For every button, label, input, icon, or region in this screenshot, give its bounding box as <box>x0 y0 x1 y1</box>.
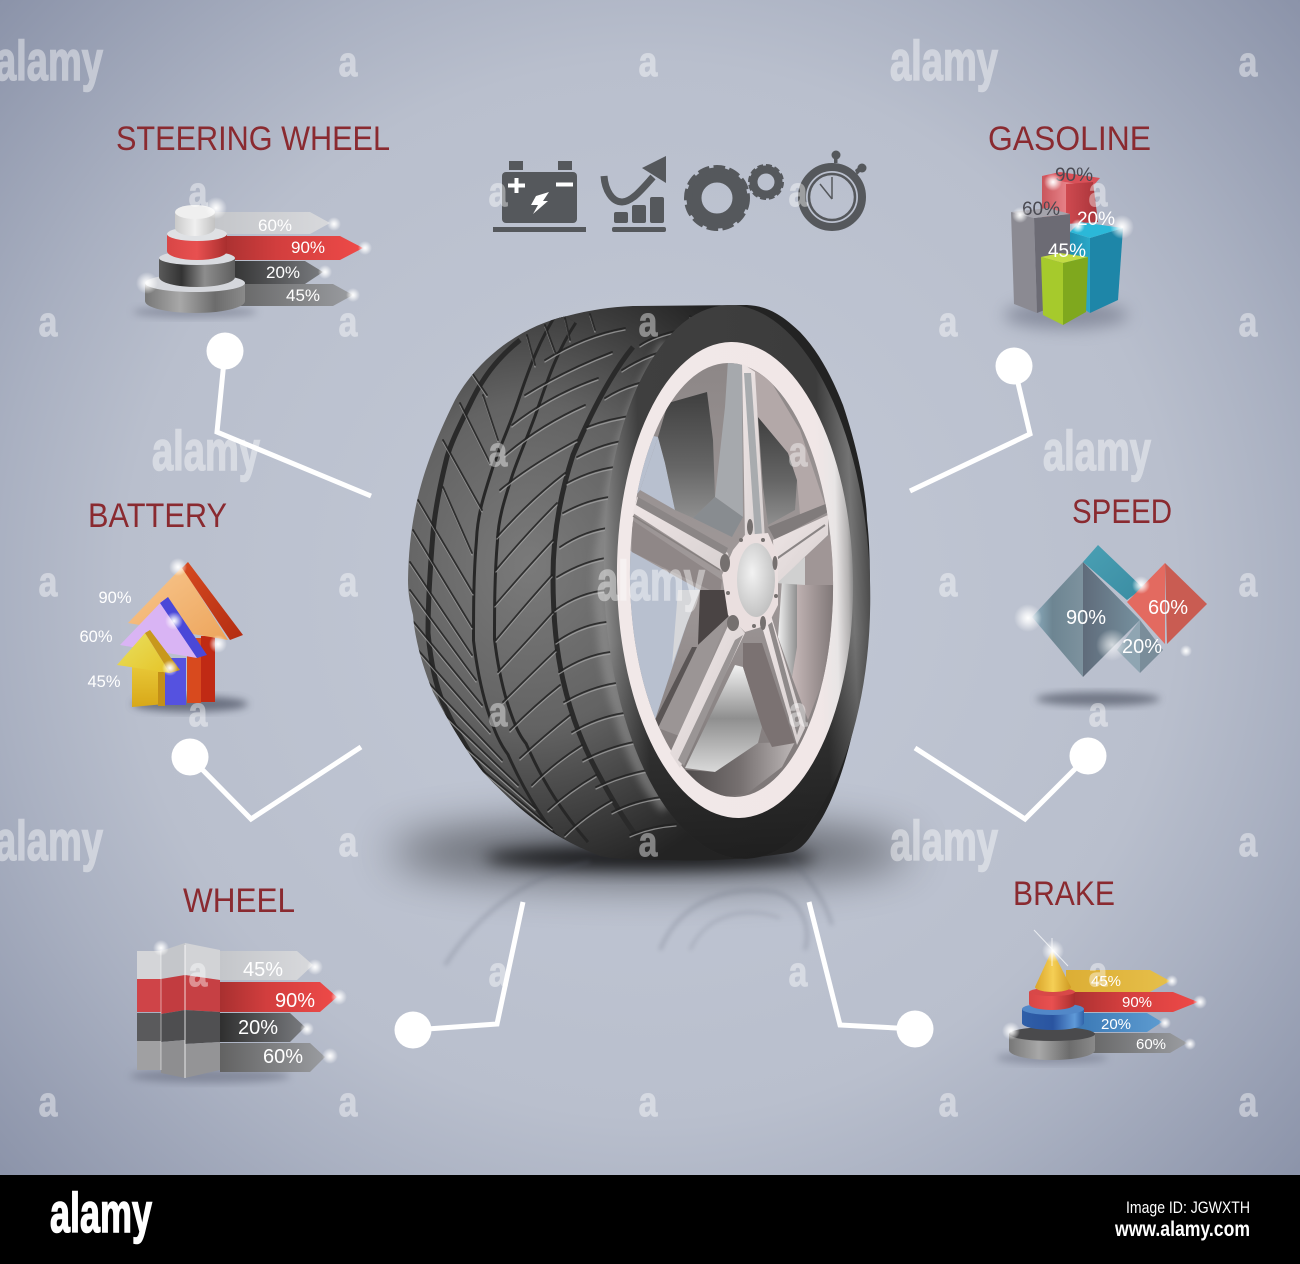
chart: wheel folded banners <box>130 940 347 1083</box>
labels: 20% <box>1077 209 1115 230</box>
stock watermarks: a <box>1239 300 1258 346</box>
stock watermarks: a <box>789 950 808 996</box>
chart: speed diamonds <box>1014 545 1207 706</box>
stock watermarks: a <box>489 690 508 736</box>
arrow: 45% <box>1066 970 1170 992</box>
spoke: lower left <box>670 617 745 768</box>
stock watermarks: a <box>1089 950 1108 996</box>
arrow: 45% <box>225 284 353 306</box>
connector: brake <box>809 902 934 1048</box>
stock watermarks: alamy <box>890 29 998 92</box>
tire tread <box>400 295 880 870</box>
stock watermarks: a <box>639 300 658 346</box>
connector: gasoline <box>910 348 1032 491</box>
footer logo: alamy <box>50 1181 152 1244</box>
stock watermarks: a <box>789 690 808 736</box>
arrow: 20% <box>1075 1013 1162 1032</box>
stock watermarks: a <box>39 300 58 346</box>
labels: 90% <box>1122 994 1152 1011</box>
stock watermarks: a <box>1239 820 1258 866</box>
arrow: 60% <box>220 1043 325 1072</box>
flares <box>1012 173 1134 239</box>
labels: 90% <box>291 238 325 257</box>
connector: steering wheel <box>206 332 371 496</box>
labels: 90% <box>275 990 315 1012</box>
labels <box>1091 973 1166 1053</box>
heading: gasoline: GASOLINE <box>988 120 1151 158</box>
stock watermarks: a <box>39 560 58 606</box>
central wheel <box>400 295 880 870</box>
spoke: right <box>773 515 828 585</box>
stock watermarks: a <box>489 950 508 996</box>
bar: red 90% <box>1042 172 1100 224</box>
stock watermarks: a <box>939 1080 958 1126</box>
stock watermarks: a <box>789 430 808 476</box>
arrow: 60% purple <box>120 597 207 705</box>
teal fold <box>1083 545 1143 600</box>
heading: wheel: WHEEL <box>183 882 295 920</box>
labels: 90% <box>1055 165 1093 186</box>
tire floor shadow <box>390 822 910 882</box>
flares <box>162 558 227 676</box>
labels: 20% <box>1101 1016 1131 1033</box>
stock watermarks: a <box>639 40 658 86</box>
labels: 20% <box>1122 636 1162 658</box>
stock watermarks: a <box>339 820 358 866</box>
sidewall <box>594 301 880 863</box>
arrow: 20% <box>220 1013 305 1042</box>
stock watermarks: alamy <box>597 549 705 612</box>
labels: 60% <box>1022 199 1060 220</box>
image id: Image ID: JGWXTH <box>1126 1198 1250 1217</box>
spoke: left <box>633 497 732 577</box>
spoke: lower right <box>763 612 805 745</box>
connector: battery <box>172 738 361 819</box>
labels: 60% <box>1148 597 1188 619</box>
stock watermarks: a <box>189 950 208 996</box>
arrow: 20% <box>225 261 323 284</box>
arrow: 90% orange <box>128 562 243 703</box>
stock watermarks: a <box>1089 170 1108 216</box>
arrow: 90% <box>220 982 337 1012</box>
labels <box>79 589 132 691</box>
labels: 20% <box>266 263 300 282</box>
arrow: 90% <box>1070 992 1198 1012</box>
rim interior and barrel <box>625 355 840 805</box>
tire reflection <box>445 858 832 965</box>
icon row <box>493 150 866 232</box>
icon: growth chart <box>604 156 666 232</box>
stock watermarks: a <box>189 170 208 216</box>
labels: 45% <box>243 959 283 981</box>
chart: gasoline 3D bars <box>1004 165 1134 329</box>
stock watermarks: a <box>639 1080 658 1126</box>
bar: grey 60% <box>1011 208 1070 313</box>
arrow: 60% <box>215 212 330 234</box>
stock watermarks: a <box>339 1080 358 1126</box>
alloy rim band <box>613 340 857 820</box>
disc stack <box>133 205 257 318</box>
labels <box>258 216 325 305</box>
labels: 45% <box>1048 241 1086 262</box>
stock watermarks: a <box>1239 40 1258 86</box>
diamond: 20% <box>1117 620 1163 673</box>
stock watermarks: a <box>939 300 958 346</box>
arrow: 60% <box>1080 1033 1187 1053</box>
stock watermarks: a <box>339 300 358 346</box>
heading: battery: BATTERY <box>88 497 227 535</box>
stock watermarks: a <box>189 690 208 736</box>
footer bar <box>0 1175 1300 1264</box>
arrow: 45% <box>220 951 313 980</box>
labels: 20% <box>238 1017 278 1039</box>
stock watermarks: a <box>639 820 658 866</box>
hub cap <box>737 543 775 617</box>
heading: steering wheel: STEERING WHEEL <box>116 120 390 158</box>
stock watermarks: alamy <box>890 809 998 872</box>
icon: battery <box>493 161 586 232</box>
arrow: 90% <box>220 236 363 260</box>
labels: 90% <box>98 589 132 607</box>
spoke: top <box>742 363 765 540</box>
stock watermarks: alamy <box>1043 419 1151 482</box>
labels: 45% <box>87 673 121 691</box>
labels <box>1022 165 1115 262</box>
labels <box>1066 597 1188 658</box>
website: www.alamy.com <box>1114 1218 1250 1241</box>
stock watermarks: a <box>939 560 958 606</box>
stock watermarks: a <box>489 430 508 476</box>
disc stack and cone <box>1009 950 1095 1060</box>
heading: speed: SPEED <box>1072 493 1172 531</box>
icon: stopwatch <box>802 150 866 227</box>
stock watermarks: a <box>1239 1080 1258 1126</box>
labels: 60% <box>263 1046 303 1068</box>
labels: 60% <box>258 216 292 235</box>
flares <box>1002 940 1207 1050</box>
stock watermarks: a <box>339 40 358 86</box>
icon: gears <box>688 166 782 227</box>
chart: battery arrows <box>79 558 248 712</box>
labels: 60% <box>79 628 113 646</box>
connector: speed <box>915 738 1106 819</box>
stock watermarks: alamy <box>152 419 260 482</box>
stock watermarks: a <box>39 1080 58 1126</box>
labels: 90% <box>1066 607 1106 629</box>
stock watermarks: a <box>789 170 808 216</box>
folded block <box>137 943 220 1078</box>
flares <box>136 197 372 302</box>
heading: brake: BRAKE <box>1013 875 1115 913</box>
diamond: 60% <box>1127 563 1207 644</box>
chart: steering wheel stacked discs <box>133 197 372 318</box>
labels: 45% <box>286 286 320 305</box>
chart: brake stacked cone <box>996 930 1207 1064</box>
flares <box>153 940 347 1064</box>
lug bolts <box>720 519 778 631</box>
connector: wheel <box>394 902 523 1048</box>
hub star <box>722 533 778 632</box>
labels: 45% <box>1091 973 1121 990</box>
stock watermarks: a <box>339 560 358 606</box>
stock watermarks: a <box>1239 560 1258 606</box>
five spokes <box>633 363 828 768</box>
flares <box>1014 576 1192 661</box>
bar: blue 20% <box>1070 222 1123 313</box>
bar: green 45% <box>1041 253 1088 325</box>
stock watermarks: a <box>489 170 508 216</box>
stock watermarks: a <box>1089 690 1108 736</box>
diamond: 90% <box>1032 562 1140 677</box>
labels <box>238 959 315 1068</box>
arrow: 45% yellow <box>117 630 180 707</box>
labels: 60% <box>1136 1036 1166 1053</box>
